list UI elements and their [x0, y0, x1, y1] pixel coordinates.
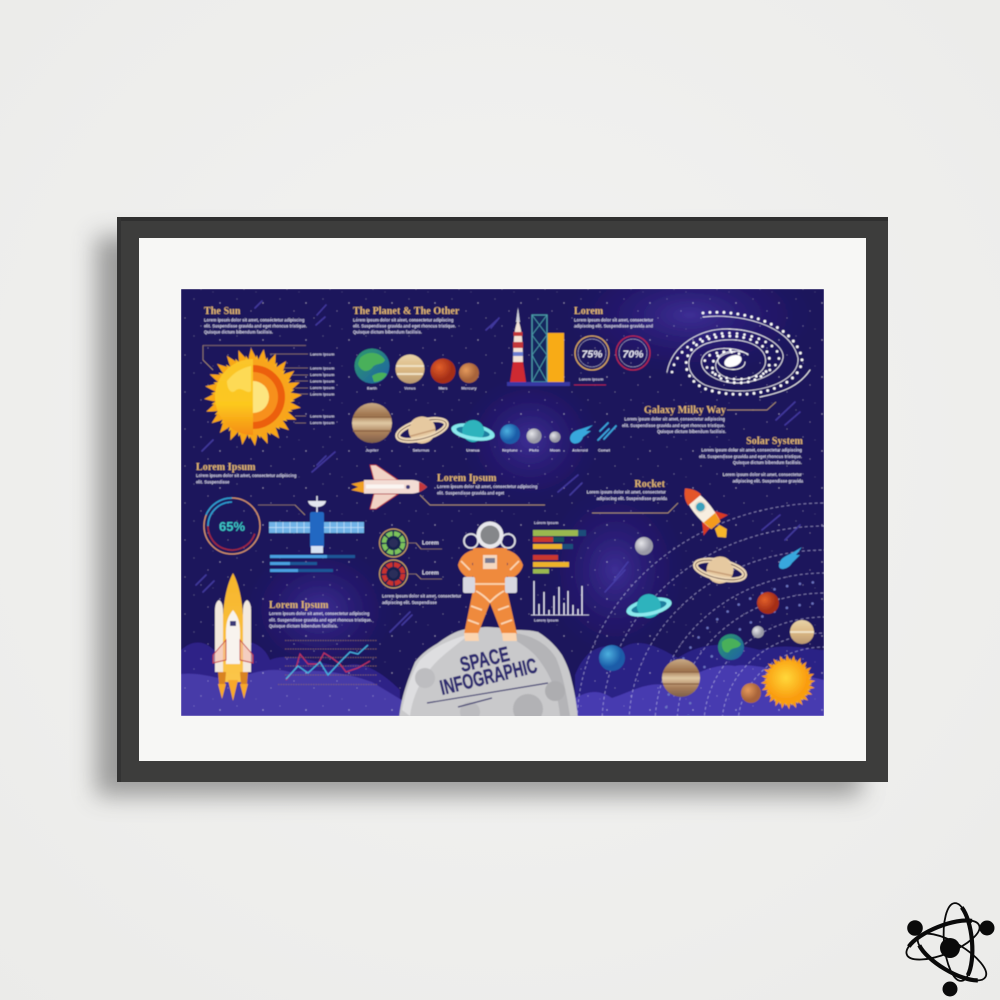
planet: Mars [757, 592, 779, 614]
icon: satellite [269, 496, 364, 553]
leader line [727, 402, 776, 410]
planet: Mars: Mars [438, 386, 448, 390]
leader line [592, 503, 678, 513]
text block: solar system description: elit. Suspendisse gravida and eget rhoncus tristique. [699, 454, 802, 459]
planet: Venus [396, 354, 424, 390]
logo: atom symbol [902, 902, 994, 996]
icon: asteroid: Asteroid [572, 448, 589, 452]
sun layer labels: Lorem Ipsum [310, 414, 335, 418]
panel: galaxy milky way text [622, 402, 776, 434]
text block: galaxy description: elit. Suspendisse gravida and eget rhoncus tristique. [622, 423, 725, 428]
illustration: astronaut [458, 522, 523, 641]
planet: Jupiter [352, 403, 392, 452]
sun layer labels: Lorem Ipsum [310, 378, 335, 384]
heading: The Planet & The Other: The Planet & The Other [353, 306, 460, 317]
planet: Saturn [693, 552, 747, 588]
text block: Lorem ipsum dolor sit amet, consectetur [587, 490, 666, 494]
panel: solar system text [699, 436, 804, 483]
planet: Earth [718, 634, 744, 660]
label: Saturnus: Saturnus [413, 448, 429, 452]
planet: small moon [752, 626, 764, 638]
illustration: spiral galaxy [667, 312, 810, 397]
planet: Uranus [624, 590, 674, 623]
illustration: launching space shuttle [213, 573, 253, 701]
planet: Neptune [599, 645, 625, 671]
gauge legend [574, 376, 606, 385]
text block: adipiscing elit. Suspendisse gravida [596, 496, 668, 501]
text block: solar system description: adipiscing elit. Suspendisse gravida [732, 478, 804, 483]
text block: Lorem ipsum dolor sit amet, consectetur adipiscing [269, 611, 370, 616]
title: Space Infographic: SPACE [458, 643, 512, 677]
text block: lorem: Lorem ipsum dolor sit amet, consectetur [574, 318, 653, 322]
heading: Lorem: Lorem [574, 306, 604, 317]
title: Space Infographic: INFOGRAPHIC [438, 654, 539, 700]
vertical bar chart [531, 581, 589, 615]
planet: Uranus [450, 419, 496, 443]
legend label: Lorem Ipsum [534, 520, 559, 525]
moon with title [399, 627, 578, 724]
background clouds [181, 641, 824, 716]
horizontal bar chart [533, 530, 586, 574]
gauge: 75%: 75% [581, 348, 603, 360]
text block: solar system description: Lorem ipsum dolor sit amet, consectetur adipiscing [701, 448, 802, 452]
dial labels [422, 540, 439, 576]
planet: Earth: Earth [367, 386, 378, 390]
dial leader lines [408, 543, 442, 579]
planet: Mercury [741, 683, 761, 703]
panel: bar charts [531, 520, 589, 622]
heading: Galaxy Milky Way: Galaxy Milky Way [644, 405, 726, 416]
text block: solar system description: Lorem ipsum dolor sit amet, consectetur [723, 472, 802, 477]
panel: rocket text [587, 479, 678, 513]
planet: Mercury: Mercury [461, 386, 477, 390]
gauge: 70% [616, 336, 650, 370]
text block: elit. Suspendisse gravida and eget rhoncus tristique. [269, 617, 372, 622]
planet: Jupiter [662, 659, 700, 697]
heading: The Sun: The Sun [204, 306, 241, 317]
dial labels: Lorem [422, 540, 439, 546]
planet: Venus [790, 620, 814, 644]
sun layer labels: Lorem Ipsum [310, 420, 335, 425]
poster [181, 289, 824, 716]
illustration: space shuttle horizontal [351, 465, 427, 509]
panel: shuttle text [420, 473, 545, 505]
meteor streaks [196, 301, 800, 632]
sun [761, 655, 815, 709]
icon: asteroid [570, 425, 593, 452]
planet: Pluto: Pluto [529, 448, 539, 452]
orbits [577, 503, 1000, 947]
leader line [258, 505, 305, 515]
text block: galaxy description: Lorem ipsum dolor sit amet, consectetur adipiscing [624, 416, 725, 422]
text block: elit. Suspendisse [196, 479, 230, 484]
text block: sun description: elit. Suspendisse gravida and eget rhoncus tristique. [204, 324, 307, 328]
sun layer labels: Lorem Ipsum [310, 372, 335, 377]
text block: solar system description: Quisque dictum bibendum facilisis. [733, 460, 802, 465]
text block: adipiscing elit. Suspendisse [382, 600, 438, 605]
panel: two dial indicators [380, 529, 462, 605]
dial labels: Lorem [422, 570, 439, 576]
white mat [139, 238, 866, 761]
leader line [420, 495, 545, 505]
sun leader lines [203, 346, 308, 423]
heading: Lorem Ipsum: Lorem Ipsum [269, 600, 329, 611]
icon: launch tower with rocket [507, 307, 570, 386]
planet: Pluto [526, 428, 542, 452]
heading: Solar System: Solar System [746, 436, 804, 447]
heading: Lorem Ipsum: Lorem Ipsum [437, 473, 497, 484]
planet: Earth [354, 348, 390, 390]
star field [181, 289, 824, 716]
solar system diagram [577, 478, 1000, 947]
planet: Moon: Moon [550, 448, 561, 452]
sun layer labels: Lorem Ipsum [310, 352, 335, 356]
illustration: sun cross-section [204, 348, 302, 446]
planet: Moon [550, 432, 561, 452]
icon: comets: Comet [598, 448, 611, 452]
text block: Lorem ipsum dolor sit amet, consectetur [382, 594, 461, 598]
gauge: 65% [201, 495, 263, 557]
sun layer labels [310, 352, 335, 425]
framed poster on wall scene [80, 217, 994, 996]
title: Space Infographic [438, 643, 539, 700]
panel: lorem ipsum and satellite [196, 462, 364, 572]
panel: rocket launch tower and gauges [507, 306, 654, 386]
icon: rocket [673, 478, 738, 548]
dial: green [380, 529, 408, 557]
text block: sun description: Lorem ipsum dolor sit amet, consectetur adipiscing [204, 318, 305, 322]
dial: red [380, 560, 408, 588]
panel: the sun [203, 306, 335, 446]
sun layer labels: Lorem Ipsum [310, 385, 335, 390]
planet: moon-grey [635, 537, 653, 555]
legend label: Lorem Ipsum [534, 618, 559, 622]
text block: planets description: Lorem ipsum dolor sit amet, consectetur adipiscing [353, 318, 454, 322]
text block: elit. Suspendisse gravida and eget [437, 490, 505, 495]
label: Uranus: Uranus [466, 448, 480, 452]
gauge: 65%: 65% [219, 519, 245, 534]
planet: Jupiter: Jupiter [366, 448, 379, 452]
data bars [270, 555, 355, 572]
panel: lorem ipsum line chart [269, 600, 377, 684]
asteroid belt [665, 582, 985, 868]
text block: Quisque dictum bibendum facilisis. [269, 624, 338, 629]
heading: Rocket: Rocket [634, 479, 666, 490]
gauge: 75% [575, 336, 609, 370]
planet: Neptune: Neptune [502, 448, 519, 452]
text block: Lorem ipsum dolor sit amet, consectetur adipiscing [437, 484, 538, 489]
gauge legend: Lorem Ipsum [579, 376, 604, 382]
gauge: 70%: 70% [622, 348, 644, 360]
heading: Lorem Ipsum: Lorem Ipsum [196, 462, 256, 473]
planet: Mars [430, 358, 456, 390]
sun layer labels: Lorem Ipsum [310, 392, 335, 396]
planet: Venus: Venus [404, 386, 416, 390]
text block: planets description: elit. Suspendisse gravida and eget rhoncus tristique. [353, 324, 456, 328]
frame shadow [96, 236, 861, 796]
planet: Neptune [500, 424, 520, 452]
sun layer labels: Lorem Ipsum [310, 366, 335, 370]
text block: Lorem ipsum dolor sit amet, consectetur adipiscing [196, 473, 297, 478]
text block: galaxy description: Quisque dictum bibendum facilisis. [657, 429, 726, 434]
icon: comets [598, 423, 616, 452]
line chart [278, 640, 377, 684]
planet: Mercury [459, 363, 479, 390]
text block: lorem: adipiscing elit. Suspendisse gravida and [574, 324, 653, 328]
black picture frame [117, 217, 888, 782]
title underline [427, 683, 548, 707]
text block: sun description: Quisque dictum bibendum facilisis. [204, 330, 273, 334]
panel: the planets and the other [352, 306, 616, 452]
planet: Saturn [394, 416, 450, 444]
text block: planets description: Quisque dictum bibendum facilisis. [353, 330, 422, 334]
icon: comet [779, 547, 802, 569]
